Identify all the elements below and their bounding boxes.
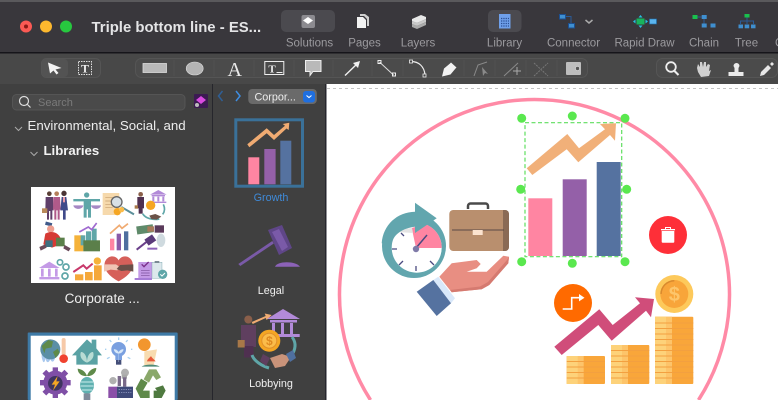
library button: Library	[487, 38, 522, 50]
icon: briefcase	[449, 204, 509, 251]
recycle symbol	[136, 369, 166, 398]
sun and wildfire	[138, 338, 160, 367]
document and magnifier	[103, 193, 134, 215]
pages button: Pages	[348, 38, 381, 50]
rapid draw button: Rapid Draw	[614, 38, 675, 50]
lobbying figure	[135, 190, 167, 220]
coin stack small	[567, 356, 605, 384]
pink circle outline	[339, 100, 730, 400]
icon: clock with arrow	[382, 203, 446, 278]
icon: hand with sleeve	[417, 256, 509, 316]
eco bulb	[78, 368, 96, 400]
library thumbnail: corporate	[31, 187, 175, 283]
people	[42, 191, 68, 220]
coin stacks with rising arrow	[554, 275, 693, 384]
bar chart: selected growth shape	[527, 123, 621, 256]
globe and thermometer	[40, 338, 68, 363]
tree heading: Environmental, Social, and	[28, 118, 186, 133]
nav arrows	[218, 91, 240, 101]
library item: growth: Growth	[254, 192, 288, 204]
growth chart	[110, 224, 128, 250]
selection tools	[42, 58, 100, 78]
solutions button	[281, 10, 335, 50]
drawing toolbar	[0, 54, 778, 84]
connector button icon	[554, 284, 592, 322]
heart with hands	[104, 256, 133, 281]
hands and money bag	[39, 222, 71, 251]
color picker icon	[194, 94, 208, 108]
factory	[108, 369, 133, 398]
delete button icon	[649, 216, 687, 254]
coin trend	[73, 257, 102, 280]
library dropdown	[248, 89, 317, 104]
solutions button: Solutions	[286, 38, 333, 50]
left sidebar	[0, 84, 213, 400]
compliance document	[135, 261, 167, 279]
selection tools: T	[81, 62, 89, 76]
bars with money	[74, 223, 100, 251]
rapid draw button	[614, 15, 675, 50]
library panel	[213, 84, 326, 400]
dollar coin: $	[669, 284, 680, 306]
view tools	[656, 58, 778, 78]
library item: lobbying: $	[266, 334, 273, 348]
shape and path tools	[136, 58, 588, 81]
pages button	[348, 14, 381, 50]
library dropdown: Corpor...	[254, 92, 296, 104]
search box: Search	[38, 97, 73, 109]
scales	[73, 192, 101, 218]
energy gear	[40, 367, 71, 398]
light bulb	[105, 337, 132, 365]
corporate thumbnail caption: Corporate ...	[65, 291, 140, 306]
library item: growth	[236, 120, 302, 204]
connector button: Connector	[547, 38, 600, 50]
chain button	[689, 15, 719, 50]
chain button: Chain	[689, 38, 719, 50]
canvas	[326, 84, 778, 400]
coin stack medium	[611, 345, 649, 384]
green house	[72, 339, 102, 365]
connector button	[547, 14, 600, 50]
libraries heading: Libraries	[44, 143, 99, 158]
layers button	[401, 15, 436, 50]
shape and path tools: T	[268, 64, 276, 76]
window controls	[20, 20, 72, 32]
tree button: Tree	[735, 38, 758, 50]
library item: lobbying: Lobbying	[249, 378, 293, 390]
temple and gears	[39, 260, 69, 279]
trend arrow	[527, 123, 616, 175]
title bar	[0, 0, 778, 54]
library item: legal: Legal	[258, 285, 284, 297]
rising arrow	[554, 297, 654, 355]
selection frame	[516, 112, 631, 268]
library item: legal	[238, 225, 300, 297]
gavel and papers	[136, 224, 165, 250]
coin stack tall	[655, 317, 693, 384]
document title: Triple bottom line - ES...	[92, 20, 261, 36]
library item: lobbying	[238, 309, 300, 390]
shape and path tools: A	[227, 59, 242, 81]
layers button: Layers	[401, 38, 436, 50]
search box	[12, 94, 185, 110]
library thumbnail: environment	[28, 332, 178, 400]
library button	[487, 10, 522, 50]
tree button	[735, 14, 758, 50]
